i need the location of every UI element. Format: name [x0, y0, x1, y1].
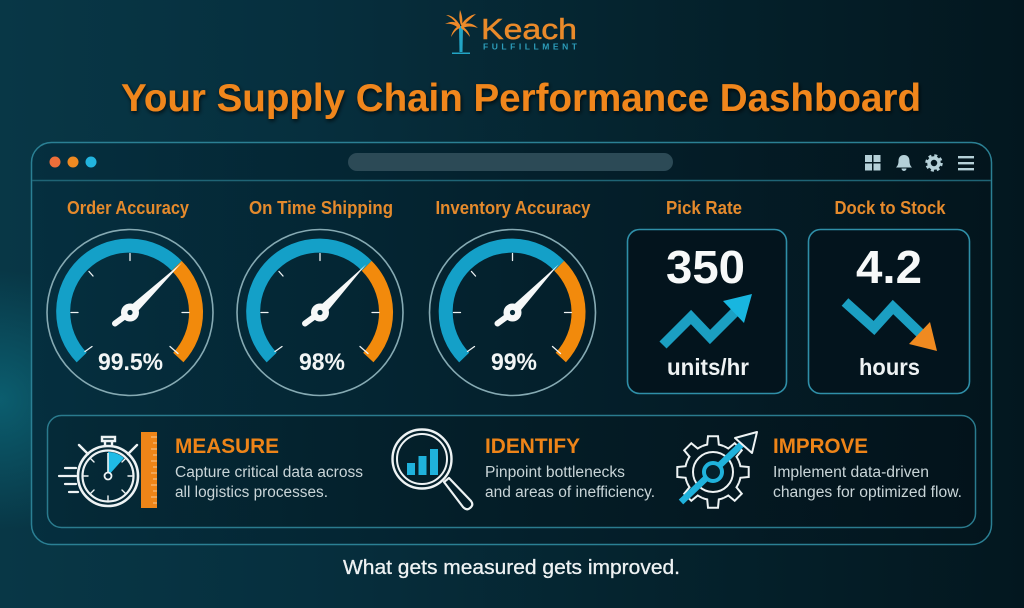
- gauge: On Time Shipping: [237, 198, 403, 396]
- icon: grid: [865, 155, 880, 170]
- metric value: 4.2: [856, 241, 922, 293]
- metric unit: hours: [859, 354, 920, 380]
- icon: bell: [896, 155, 912, 171]
- step: improve: [677, 432, 962, 508]
- gauge value: 99.5%: [98, 349, 163, 376]
- icon: gear with arrow: [677, 432, 757, 508]
- icon: falling arrow: [845, 302, 937, 351]
- gauge value: 98%: [299, 349, 345, 376]
- logo tagline: FULFILLMENT: [483, 42, 578, 52]
- step description: changes for optimized flow.: [773, 484, 962, 501]
- step description: all logistics processes.: [175, 484, 328, 501]
- step description: [175, 464, 363, 501]
- step description: Pinpoint bottlenecks: [485, 464, 625, 481]
- panel: measure identify improve: [48, 416, 976, 528]
- gauge label: Order Accuracy: [67, 198, 189, 218]
- metric value: 350: [666, 241, 745, 293]
- step heading: IMPROVE: [773, 435, 868, 458]
- panel: dashboard window: [32, 142, 992, 544]
- icon: rising arrow: [663, 294, 752, 345]
- step description: and areas of inefficiency.: [485, 484, 655, 501]
- icon: palm tree: [445, 10, 478, 54]
- logo: Keach Fulfillment: [445, 10, 578, 54]
- icon: settings gear: [926, 156, 942, 170]
- step description: Capture critical data across: [175, 464, 363, 481]
- step heading: MEASURE: [175, 435, 279, 458]
- step: identify: [392, 430, 655, 509]
- gauge dial: [237, 230, 403, 396]
- metric card: [628, 230, 786, 394]
- metric: Pick Rate: [628, 198, 786, 394]
- icon: menu: [958, 156, 974, 170]
- gauge: Order Accuracy: [47, 198, 213, 396]
- gauge: Inventory Accuracy: [430, 198, 596, 396]
- metric card: [808, 230, 970, 394]
- gauge label: Inventory Accuracy: [436, 198, 590, 218]
- logo wordmark: Keach: [481, 14, 577, 46]
- metric unit: units/hr: [667, 354, 749, 380]
- gauge dial: [430, 230, 596, 396]
- icon: stopwatch and ruler: [59, 432, 157, 508]
- gauge dial: [47, 230, 213, 396]
- search bar: [348, 153, 673, 171]
- metric: Dock to Stock: [808, 198, 970, 394]
- icon: magnifying glass with bars: [392, 430, 472, 509]
- footer tagline: What gets measured gets improved.: [343, 557, 680, 579]
- gauge label: On Time Shipping: [249, 198, 393, 218]
- step description: [485, 464, 655, 501]
- metric label: Pick Rate: [666, 198, 742, 218]
- metric label: Dock to Stock: [834, 198, 946, 218]
- title: Your Supply Chain Performance Dashboard: [121, 77, 921, 120]
- window dots: [50, 156, 96, 168]
- step heading: IDENTIFY: [485, 435, 580, 458]
- step: measure: [59, 432, 363, 508]
- gauge value: 99%: [491, 349, 537, 376]
- step description: Implement data-driven: [773, 464, 929, 481]
- toolbar icons: [865, 155, 974, 171]
- step description: [773, 464, 962, 501]
